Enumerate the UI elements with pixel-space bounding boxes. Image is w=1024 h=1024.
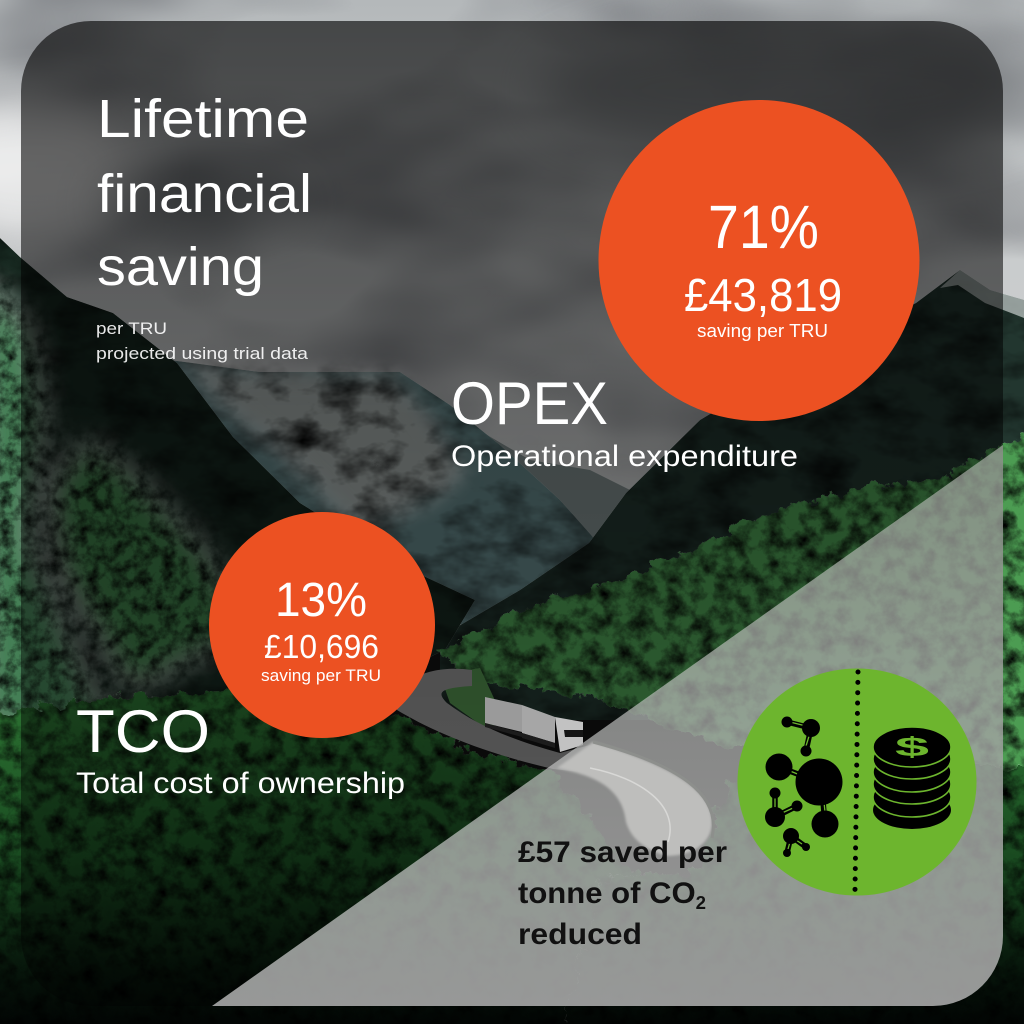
right forest slope [440,425,1024,790]
circle: OPEX saving: saving per TRU [697,321,828,341]
title: lifetime financial saving: financial [97,164,312,224]
CO2 saving callout: 2 [696,893,706,913]
OPEX label [451,370,798,473]
far haze ridge [470,425,630,545]
lit slope on left mountain [50,440,250,690]
TCO label: TCO [76,698,210,765]
subtitle: projected using trial data [96,344,309,363]
road hairpin [397,669,610,775]
circle: TCO saving [209,512,435,738]
CO2 saving callout: tonne of CO [518,877,690,910]
title: lifetime financial saving: saving [97,237,264,297]
TCO label [76,698,405,800]
subtitle: per TRU [96,319,167,338]
sky with clouds [0,0,1024,640]
grass in road hairpin [440,668,505,728]
icon: coin stack [873,727,951,829]
road visible through light panel [557,742,713,856]
light triangular panel [212,445,1003,1006]
lower left forest [0,690,640,1024]
CO2 saving callout: reduced [518,918,642,951]
lit edge on left mountain [0,275,110,730]
truck [485,697,583,752]
title: lifetime financial saving: Lifetime [97,89,309,149]
icon: molecules [765,716,842,857]
far mountain [170,360,600,630]
CO2 saving callout [518,836,727,951]
snow and rock on far mountain [180,362,465,530]
circle: OPEX saving [598,100,920,421]
circle: OPEX saving: 71% [708,193,819,261]
left mountain [0,238,475,740]
circle: OPEX saving: £43,819 [684,269,842,321]
OPEX label: Operational expenditure [451,440,798,473]
icon: coin stack: $ [895,732,929,762]
circle: TCO saving: £10,696 [264,628,379,665]
circle: TCO saving: saving per TRU [261,666,381,685]
dotted divider [855,672,858,890]
right mountain [440,270,1024,720]
circle: TCO saving: 13% [275,574,367,627]
title: lifetime financial saving [97,89,312,297]
CO2 saving callout: £57 saved per [518,836,727,869]
OPEX label: OPEX [451,370,608,437]
TCO label: Total cost of ownership [76,767,405,800]
lower right forest [560,745,1024,1024]
subtitle [96,319,309,363]
snow on right peak [940,270,1024,318]
icon: green circle with molecules and coins [738,668,976,896]
